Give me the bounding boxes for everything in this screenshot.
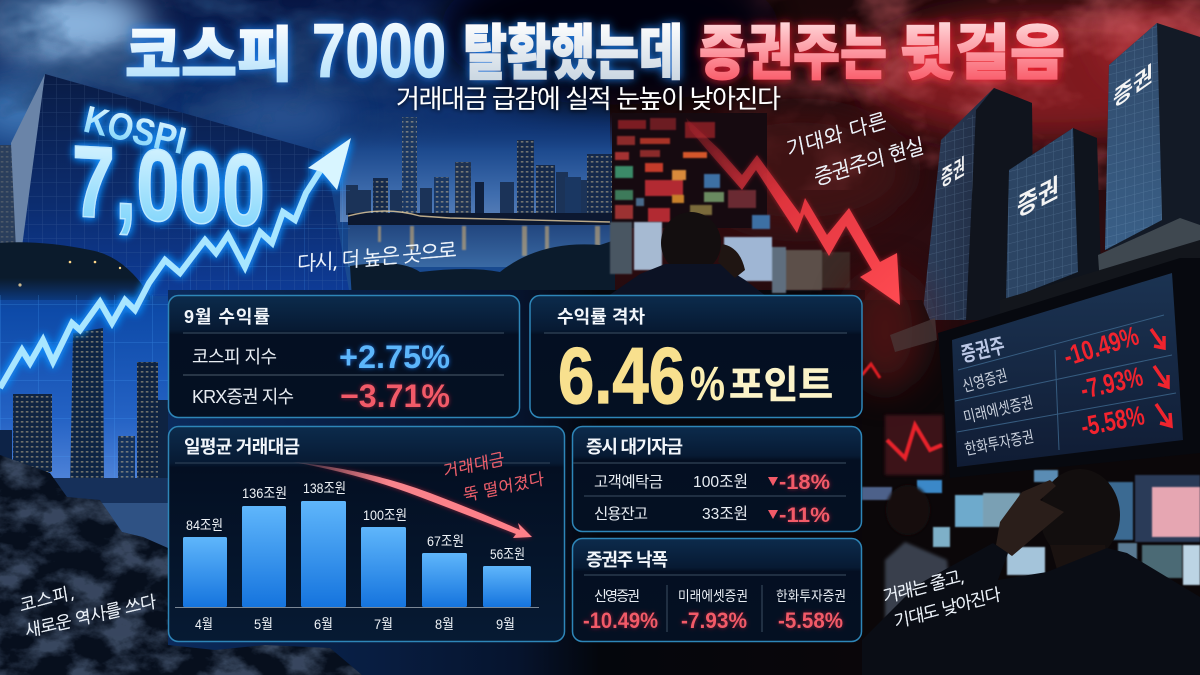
stat: 미래에셋증권 bbox=[678, 588, 748, 633]
bar chart: 136조원 bbox=[242, 485, 287, 501]
row: 고객예탁금: 고객예탁금 bbox=[594, 473, 663, 491]
stat: 신영증권: 신영증권 bbox=[594, 588, 640, 604]
row: KRX증권 지수: KRX증권 지수 bbox=[192, 387, 294, 407]
row: 신용잔고: 신용잔고 bbox=[594, 505, 648, 523]
handwriting: history note: 코스피, bbox=[19, 583, 76, 615]
monitor rows: 미래에셋증권 bbox=[962, 393, 1035, 427]
monitor red arrows bbox=[1151, 329, 1171, 426]
dark area behind panels bbox=[168, 290, 865, 675]
heading: 증시 대기자금: 증시 대기자금 bbox=[586, 437, 683, 457]
big number: 6.46%포인트: 6.46 bbox=[558, 331, 685, 420]
row: 신용잔고: -11% bbox=[779, 504, 830, 527]
panel: September returns bbox=[168, 296, 520, 418]
bar chart: 7월 bbox=[374, 616, 393, 632]
KOSPI 7,000 sign bbox=[72, 99, 265, 248]
monitor values: -5.58% bbox=[1078, 400, 1147, 442]
securities towers bbox=[922, 23, 1200, 340]
monitor rows: 한화투자증권 bbox=[963, 428, 1035, 459]
trend arrow falling bbox=[293, 462, 532, 538]
handwriting: rising note: 다시, 더 높은 곳으로 bbox=[297, 240, 457, 274]
stat: 미래에셋증권: -7.93% bbox=[681, 608, 747, 633]
title: 코스피 bbox=[125, 22, 293, 89]
title: 탈환했는데 bbox=[463, 20, 683, 87]
analyst silhouette with hand on head bbox=[608, 212, 766, 296]
red falling arrow bbox=[686, 118, 900, 305]
handwriting: trading value plunged: 거래대금 bbox=[443, 450, 505, 480]
monitor heading: 증권주 bbox=[959, 335, 1007, 367]
handwriting: trader note: 거래는 줄고, bbox=[882, 566, 966, 606]
lower right trading floor bbox=[845, 270, 1200, 675]
row: KRX증권 지수 bbox=[192, 378, 450, 414]
big number: 6.46%포인트 bbox=[558, 331, 833, 420]
bar chart: 9월 bbox=[496, 616, 515, 632]
row: 코스피 지수 bbox=[192, 339, 450, 375]
trading screens, blurred bbox=[610, 113, 850, 293]
monitor values bbox=[1060, 321, 1147, 442]
title: 뒷걸음 bbox=[900, 20, 1065, 87]
KOSPI 7,000 sign: KOSPI bbox=[80, 99, 190, 163]
heading: 9월 수익률: 9월 수익률 bbox=[184, 307, 270, 327]
bar chart bbox=[175, 480, 539, 632]
building sign: 증권 center: 증권 bbox=[1017, 172, 1059, 223]
rocks foreground bbox=[0, 450, 370, 675]
handwriting: trading value plunged bbox=[443, 450, 545, 504]
heading: 증권주 낙폭: 증권주 낙폭 bbox=[586, 550, 668, 570]
title: 증권주는 bbox=[699, 20, 887, 87]
big number: 6.46%포인트: % bbox=[690, 358, 725, 411]
row: 신용잔고: 33조원 bbox=[702, 505, 748, 523]
subtitle: 거래대금 급감에 실적 눈높이 낮아진다 bbox=[396, 84, 781, 114]
handwriting: history note: 새로운 역사를 쓰다 bbox=[24, 592, 157, 640]
bar chart: 67조원 bbox=[427, 533, 464, 549]
stat: 한화투자증권: 한화투자증권 bbox=[776, 588, 846, 604]
handwriting: trading value plunged: 뚝 떨어졌다 bbox=[463, 470, 545, 504]
bar chart: 84조원 bbox=[186, 517, 223, 533]
heading: 수익률 격차: 수익률 격차 bbox=[557, 307, 645, 327]
bar chart: 4월 bbox=[195, 616, 213, 632]
row: 신용잔고 bbox=[594, 504, 830, 527]
building sign: 증권 right: 증권 bbox=[1113, 60, 1153, 113]
title bbox=[125, 9, 1065, 94]
handwriting: reality note: 기대와 다른 bbox=[785, 110, 888, 160]
panel: brokerage stock declines bbox=[572, 538, 862, 642]
skyline across the river bbox=[340, 112, 615, 267]
handwriting: trader note: 기대도 낮아진다 bbox=[893, 585, 1002, 631]
stock drop monitor bbox=[938, 258, 1200, 478]
background scene: blue skyline and red trading floor bbox=[0, 0, 1200, 341]
bar chart: 100조원 bbox=[363, 507, 407, 523]
panel: daily average trading value bbox=[168, 426, 564, 642]
title: 7000 bbox=[312, 9, 446, 94]
KOSPI 7,000 sign: 7,000 bbox=[72, 124, 265, 248]
monitor values: -10.49% bbox=[1060, 321, 1142, 372]
bar chart: 56조원 bbox=[490, 546, 525, 562]
handwriting: trader note bbox=[882, 566, 1002, 631]
monitor rows bbox=[960, 367, 1035, 459]
row: 고객예탁금 bbox=[594, 471, 830, 494]
stat: 신영증권 bbox=[583, 588, 658, 633]
monitor values: -7.93% bbox=[1078, 361, 1146, 405]
bar chart: 8월 bbox=[435, 616, 454, 632]
stat: 한화투자증권 bbox=[776, 588, 846, 633]
heading: 일평균 거래대금: 일평균 거래대금 bbox=[184, 437, 300, 457]
KOSPI glass building bbox=[0, 74, 350, 296]
panel: standby funds bbox=[572, 426, 862, 532]
bar chart: 5월 bbox=[254, 616, 273, 632]
stat: 한화투자증권: -5.58% bbox=[778, 608, 843, 633]
row: 코스피 지수: +2.75% bbox=[339, 339, 450, 375]
bar chart: 138조원 bbox=[303, 480, 346, 496]
bar chart: 6월 bbox=[314, 616, 333, 632]
row: 고객예탁금: 100조원 bbox=[693, 473, 748, 491]
row: 고객예탁금: -18% bbox=[779, 471, 830, 494]
glowing rising chart line with arrow bbox=[0, 138, 351, 388]
big number: 6.46%포인트: 포인트 bbox=[729, 365, 833, 407]
stat: 신영증권: -10.49% bbox=[583, 608, 658, 633]
row: 코스피 지수: 코스피 지수 bbox=[192, 347, 277, 367]
building sign: 증권 left: 증권 bbox=[941, 154, 965, 193]
row: KRX증권 지수: −3.71% bbox=[340, 378, 450, 414]
monitor rows: 신영증권 bbox=[960, 367, 1009, 396]
foreground trader holding head bbox=[862, 469, 1200, 675]
handwriting: reality note: 증권주의 현실 bbox=[813, 135, 926, 188]
dark treeline bbox=[0, 240, 615, 300]
handwriting: reality note bbox=[785, 110, 926, 188]
left lower skyline bbox=[0, 278, 172, 553]
panel: return gap bbox=[530, 296, 862, 420]
stat: 미래에셋증권: 미래에셋증권 bbox=[678, 588, 748, 604]
